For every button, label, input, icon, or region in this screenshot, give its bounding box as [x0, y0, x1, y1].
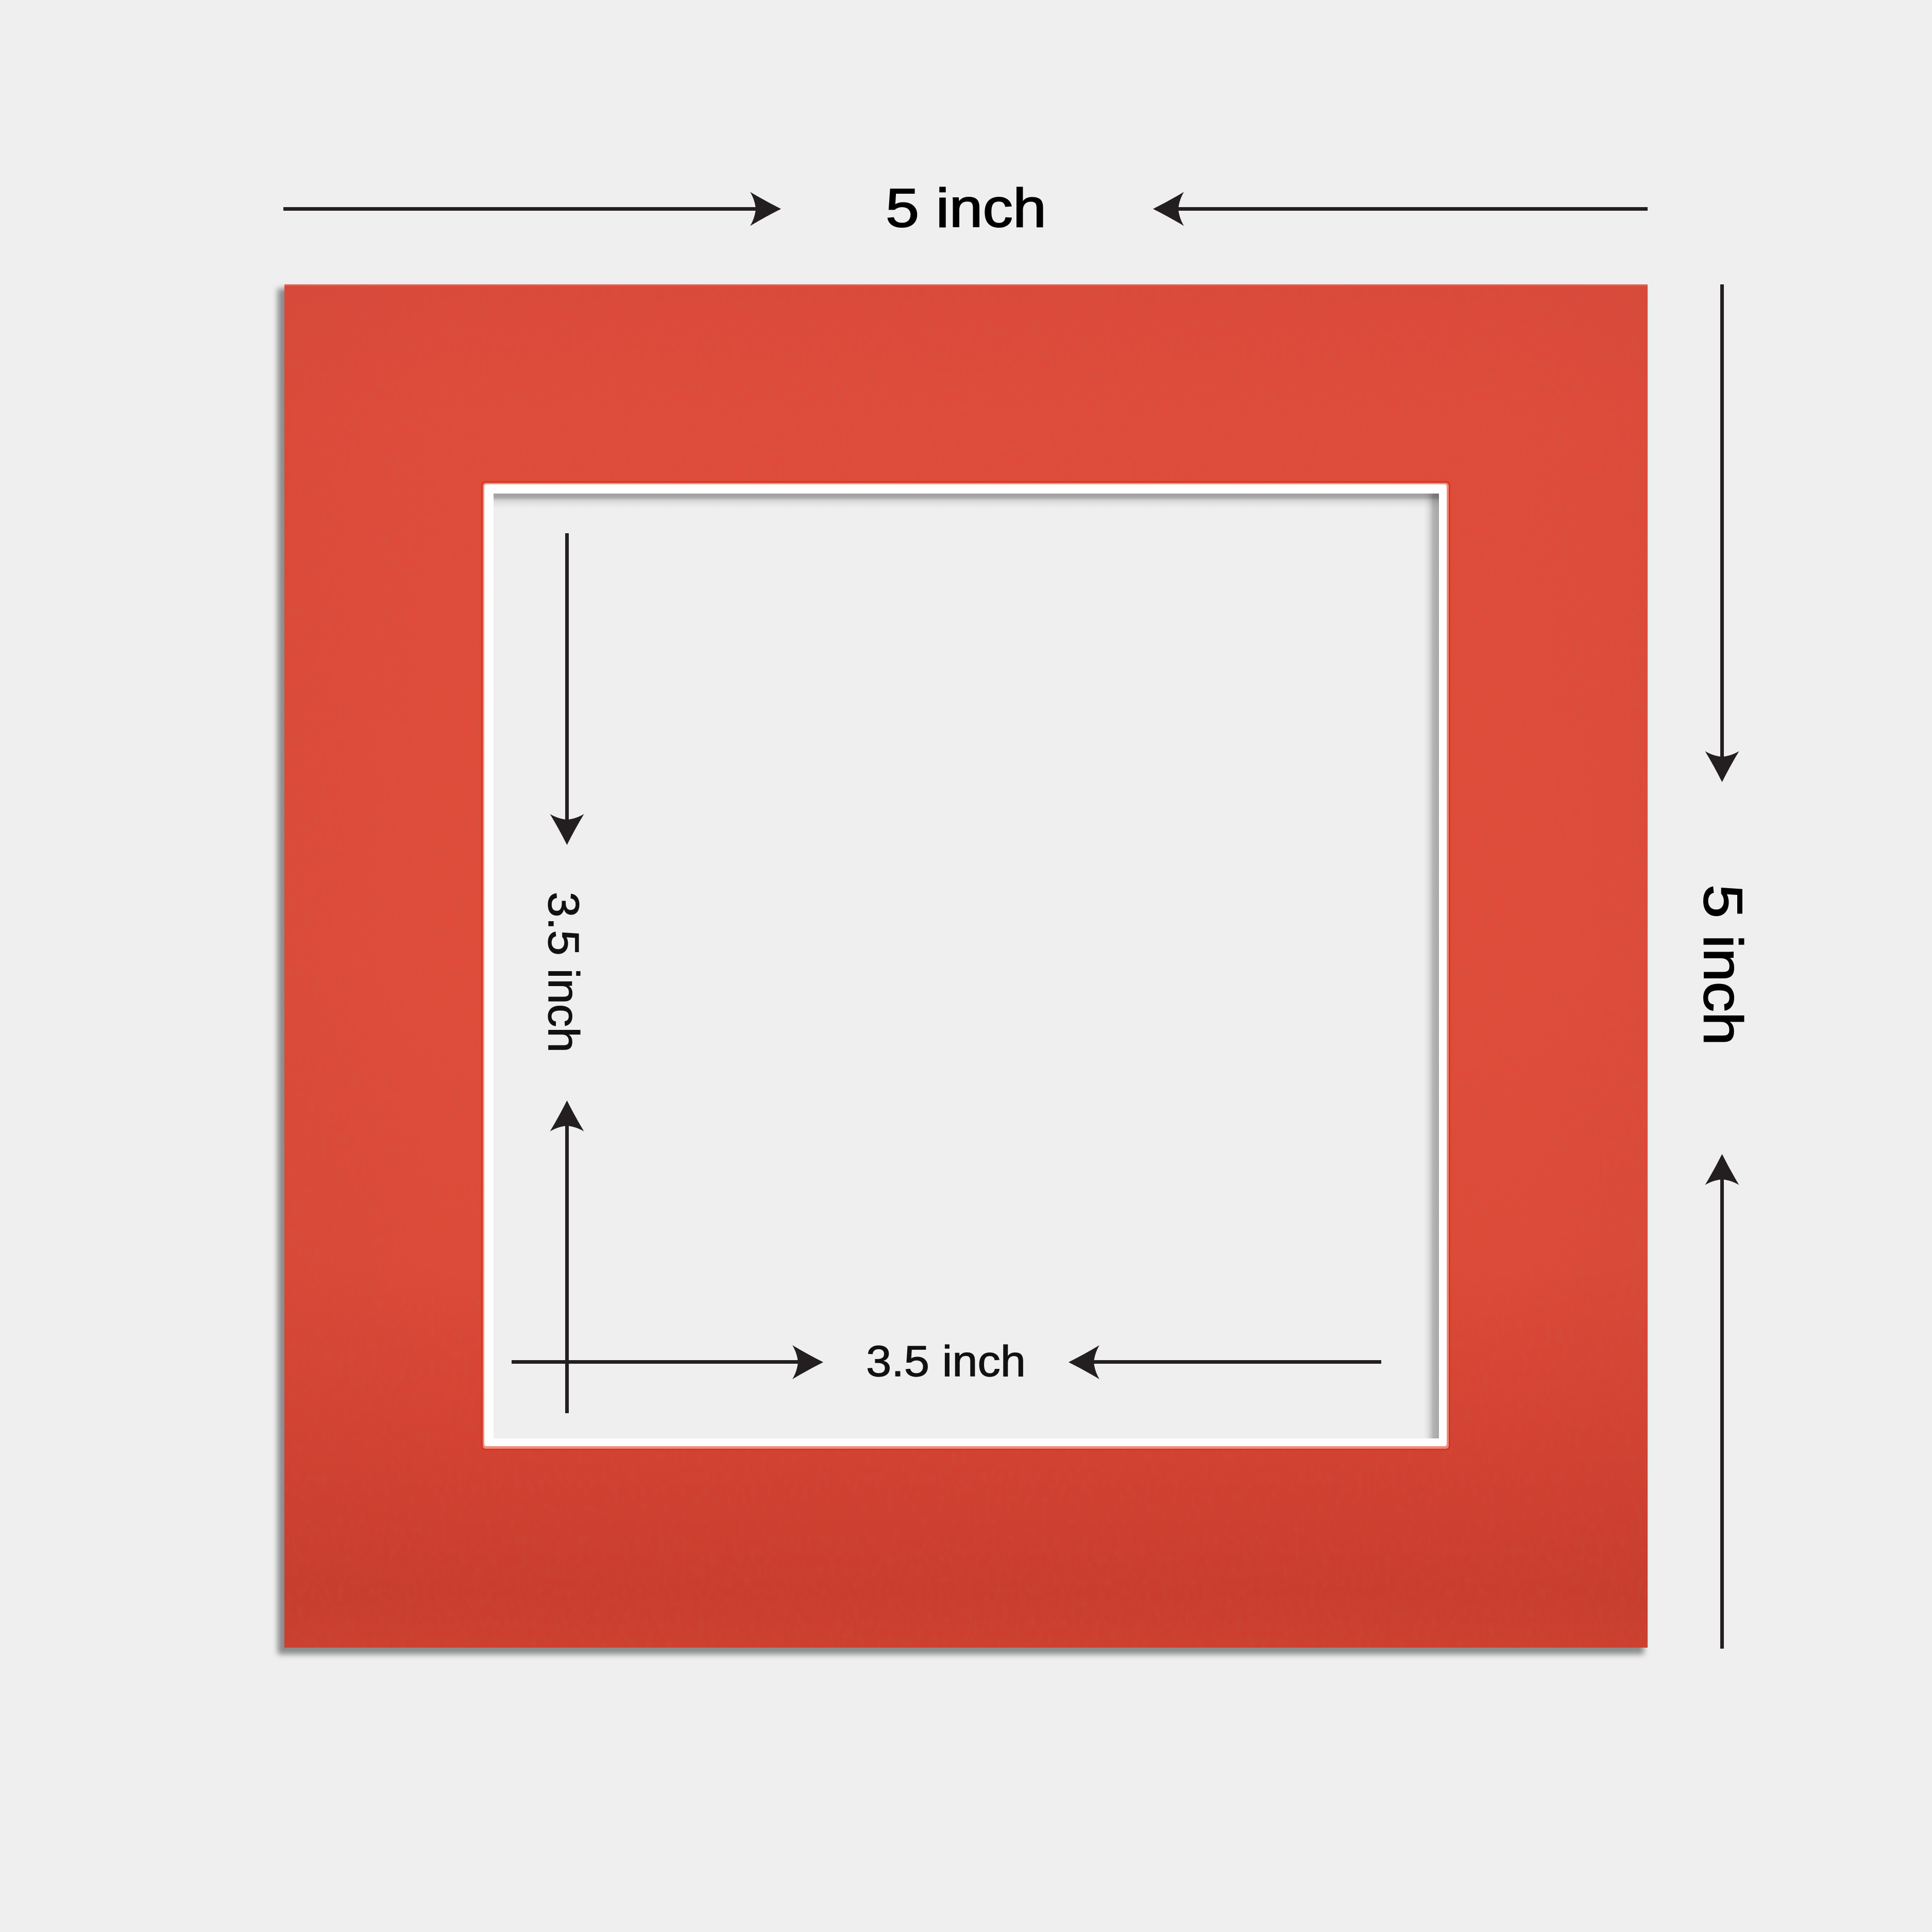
outer height label: 5 inch [1692, 885, 1753, 1045]
outer width arrow: right, pointing left [1153, 192, 1648, 226]
outer height arrow: top, pointing down [1705, 284, 1739, 782]
mat window bevel and opening [481, 481, 1450, 1450]
opening height label: 3.5 inch [539, 892, 588, 1053]
outer width label: 5 inch [886, 178, 1046, 239]
opening width arrow: left, pointing right [512, 1345, 823, 1379]
outer height arrow: bottom, pointing up [1705, 1154, 1739, 1649]
mat drop shadow [278, 289, 1644, 1654]
opening width label: 3.5 inch [866, 1337, 1026, 1385]
outer width arrow: left, pointing right [283, 192, 781, 226]
mat board [284, 284, 1648, 1648]
panel: red photo mat with square opening [278, 284, 1648, 1654]
opening height arrow: bottom, pointing up [550, 1100, 584, 1413]
opening height arrow: top, pointing down [550, 533, 584, 845]
opening width arrow: right, pointing left [1069, 1345, 1381, 1379]
